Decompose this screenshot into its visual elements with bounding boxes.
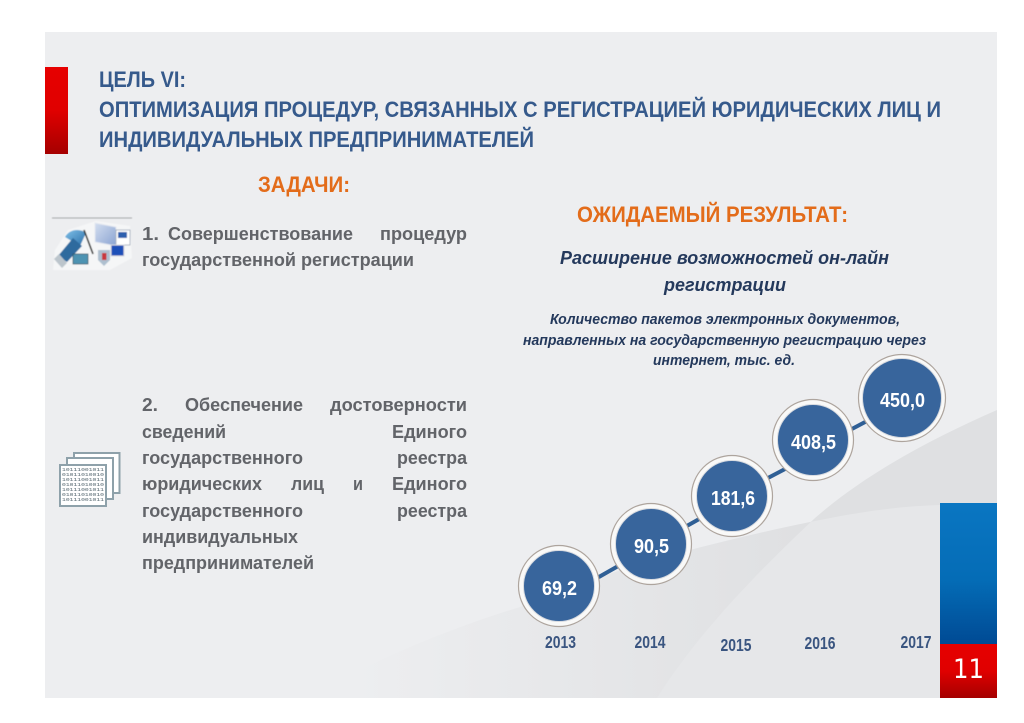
node 2017 bbox=[858, 354, 946, 442]
task 2 text: 2. bbox=[142, 395, 158, 415]
year labels: 2017 bbox=[900, 632, 932, 652]
title bbox=[99, 67, 941, 152]
task 1 text: государственной регистрации bbox=[142, 250, 414, 270]
node 2013 bbox=[518, 546, 600, 626]
node 2015 bbox=[692, 456, 772, 536]
title: ОПТИМИЗАЦИЯ ПРОЦЕДУР, СВЯЗАННЫХ С РЕГИСТРАЦИЕЙ ЮРИДИЧЕСКИХ ЛИЦ И bbox=[99, 97, 941, 122]
task 2 text: сведений bbox=[142, 422, 226, 442]
icon: stacked binary documents: 10111001011 bbox=[62, 467, 104, 473]
page number badge: 11 bbox=[953, 654, 984, 685]
background swoosh: light overlap bbox=[657, 410, 997, 698]
icon: stacked binary documents: 01011010010 bbox=[62, 472, 104, 478]
result subtitle: Расширение возможностей он-лайн bbox=[560, 248, 889, 268]
icon: stacked binary documents: 10111001011 bbox=[62, 487, 104, 493]
task 2 text: предпринимателей bbox=[142, 553, 314, 573]
year labels: 2014 bbox=[634, 632, 666, 652]
icon: stacked binary documents bbox=[60, 453, 120, 506]
task 2 text bbox=[142, 395, 468, 573]
task 1 text bbox=[142, 224, 467, 270]
chart caption: направленных на государственную регистрацию через bbox=[523, 333, 927, 349]
task 2 text: реестра bbox=[397, 501, 468, 521]
chart caption bbox=[523, 312, 927, 369]
task 2 text: Единого bbox=[392, 474, 467, 494]
task 2 text: лиц bbox=[291, 474, 324, 494]
node 2017: 450,0 bbox=[880, 390, 925, 412]
task 2 text: индивидуальных bbox=[142, 527, 298, 547]
title: ЦЕЛЬ VI: bbox=[99, 67, 186, 92]
task 1 text: 1. bbox=[142, 224, 159, 244]
task 2 text: достоверности bbox=[330, 395, 467, 415]
icon: stacked binary documents: 10111001011 bbox=[62, 497, 104, 503]
task 2 text: юридических bbox=[142, 474, 262, 494]
chart caption: интернет, тыс. ед. bbox=[653, 353, 795, 369]
heading: tasks: ЗАДАЧИ: bbox=[258, 172, 350, 197]
task 2 text: государственного bbox=[142, 501, 303, 521]
icon: stacked binary documents: 01011010010 bbox=[62, 482, 104, 488]
year labels: 2015 bbox=[720, 635, 752, 655]
result subtitle bbox=[560, 248, 889, 295]
task 2 text: и bbox=[353, 474, 363, 494]
node 2016: 408,5 bbox=[791, 432, 836, 454]
task 2 text: реестра bbox=[397, 448, 468, 468]
task 1 text: процедур bbox=[380, 224, 467, 244]
node 2013: 69,2 bbox=[542, 578, 577, 600]
year labels bbox=[545, 632, 932, 655]
node 2014 bbox=[610, 504, 692, 584]
background swoosh: darker wave bbox=[657, 410, 997, 698]
year labels: 2016 bbox=[804, 633, 836, 653]
icon: stacked binary documents: 10111001011 bbox=[62, 477, 104, 483]
page number badge bbox=[940, 644, 997, 698]
task 2 text: Обеспечение bbox=[185, 395, 303, 415]
chart caption: Количество пакетов электронных документов, bbox=[550, 312, 900, 328]
year labels: 2013 bbox=[545, 632, 576, 652]
task 1 text: Совершенствование bbox=[168, 224, 353, 244]
task 2 text: Единого bbox=[392, 422, 467, 442]
node 2014: 90,5 bbox=[634, 536, 669, 558]
icon: computer and usb collage bbox=[52, 218, 132, 270]
node 2016 bbox=[772, 400, 854, 480]
blue corner bar bbox=[940, 503, 997, 644]
icon: stacked binary documents: 01011010010 bbox=[62, 492, 104, 498]
red title accent bar bbox=[45, 67, 68, 154]
timeline chart bbox=[518, 354, 946, 626]
background swoosh: lower wave bbox=[353, 503, 997, 698]
title: ИНДИВИДУАЛЬНЫХ ПРЕДПРИНИМАТЕЛЕЙ bbox=[99, 127, 534, 152]
node 2015: 181,6 bbox=[711, 488, 755, 510]
heading: expected result: ОЖИДАЕМЫЙ РЕЗУЛЬТАТ: bbox=[577, 202, 848, 227]
result subtitle: регистрации bbox=[663, 275, 786, 295]
task 2 text: государственного bbox=[142, 448, 303, 468]
